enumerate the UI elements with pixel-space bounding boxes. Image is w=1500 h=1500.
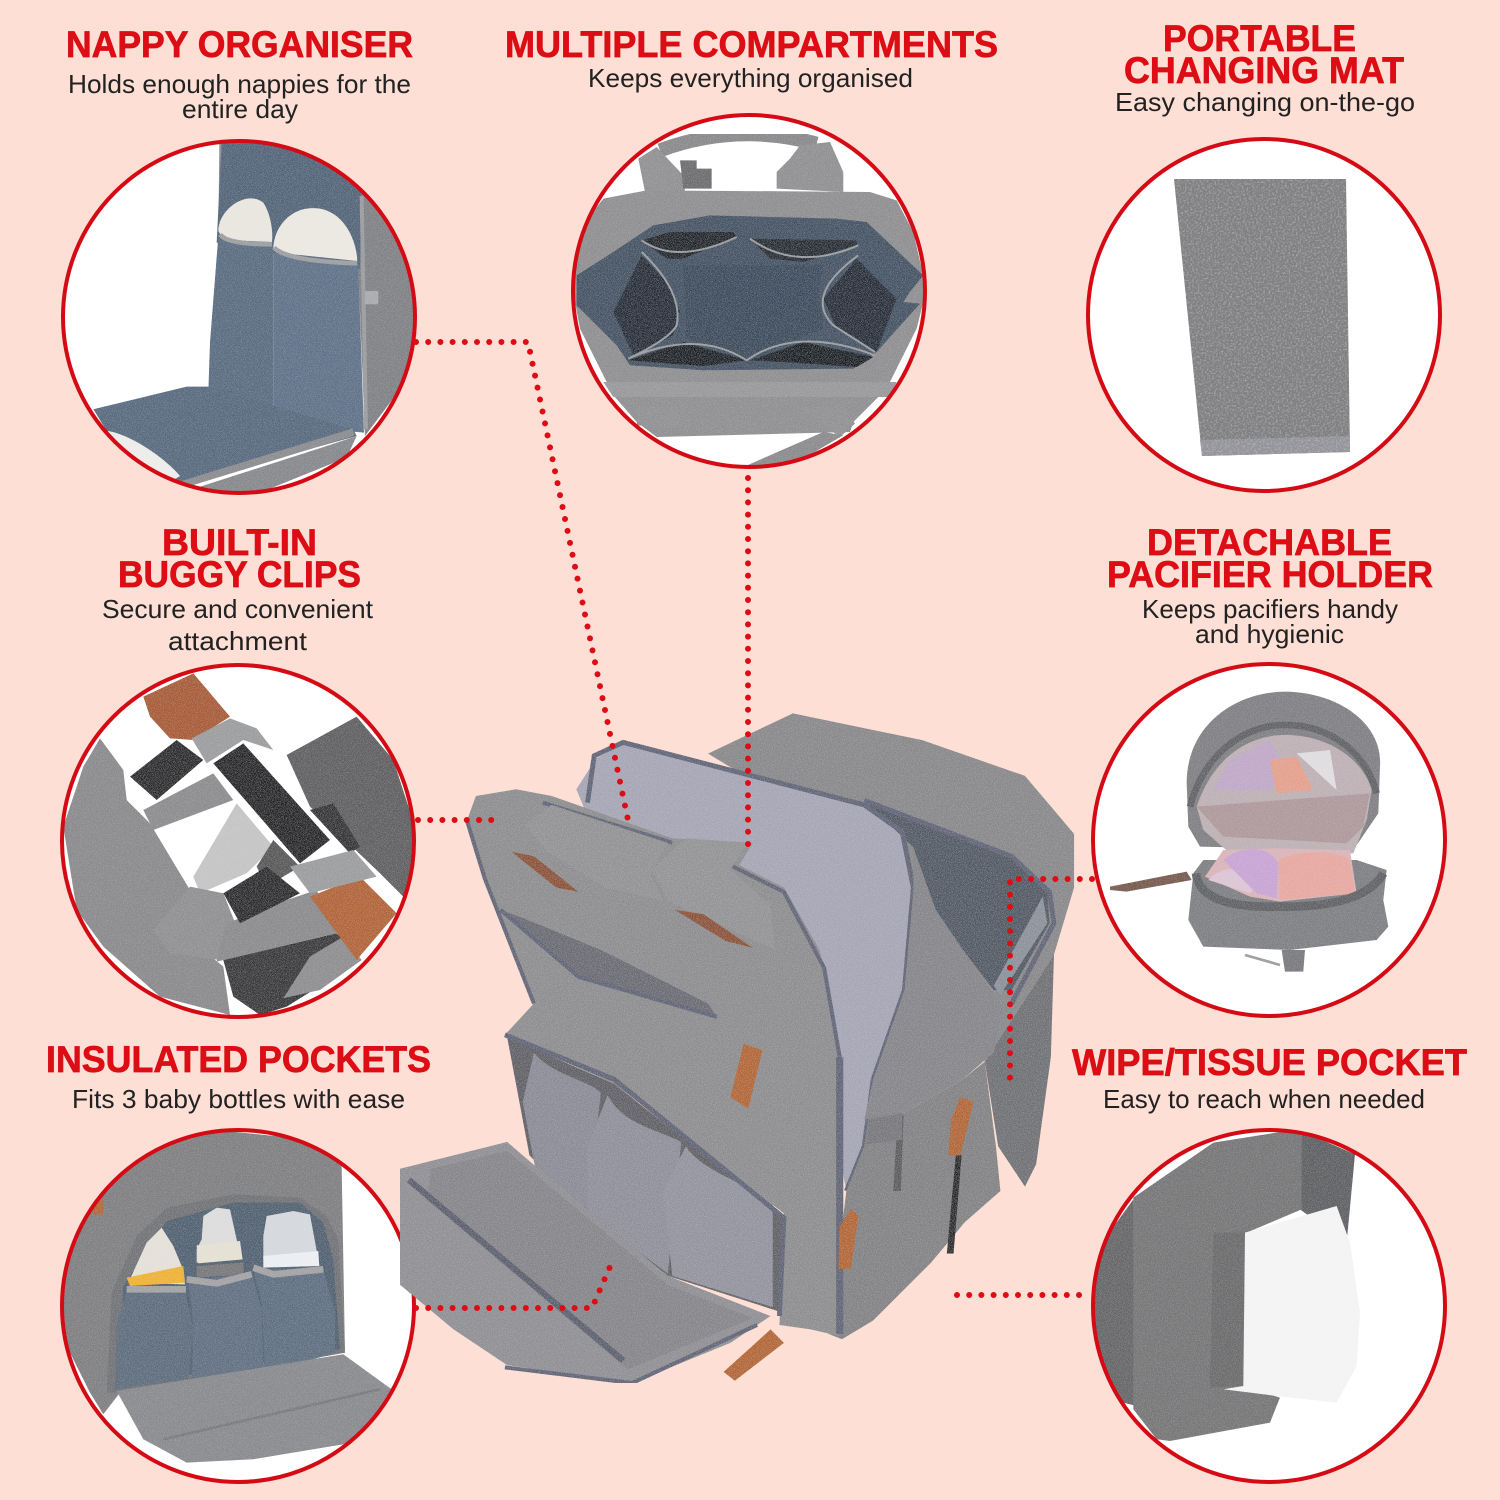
carry handle left [525,805,668,901]
heading: wipe tissue pocket: WIPE/TISSUE POCKET [1072,1042,1467,1083]
heading: wipe tissue pocket [1072,1042,1467,1114]
heading: wipe tissue pocket: Easy to reach when needed [1103,1084,1425,1114]
inner pale strip [994,896,1047,995]
panel: wipe tissue pocket circle [1090,1130,1445,1482]
heading: built-in buggy clips: attachment [168,626,308,656]
heading: nappy organiser: Holds enough nappies for the [68,69,411,99]
backpack front silhouette [467,789,840,1336]
dotted leader: insulated pockets [416,1262,612,1308]
bottle pocket interior [507,1037,784,1312]
heading: multiple compartments: MULTIPLE COMPARTMENTS [505,24,998,65]
leather zip puller front [730,1044,762,1108]
heading: detachable pacifier holder: Keeps pacifiers handy [1142,594,1398,624]
flap pocket opening [500,910,717,1017]
heading: built-in buggy clips: Secure and convenient [102,594,374,624]
icon: folded changing mat [1174,179,1350,456]
heading: portable changing mat [1115,18,1415,117]
flap bottom zip [505,1325,757,1383]
flap zip [409,1180,623,1361]
heading: multiple compartments [505,24,998,93]
open front flap [400,1142,771,1383]
heading: nappy organiser: entire day [182,94,298,124]
vertical main zip [832,1057,848,1334]
opened compartment lining [576,745,913,1191]
side webbing [866,1113,902,1144]
carry handle right [652,838,775,950]
heading: detachable pacifier holder: and hygienic [1195,619,1344,649]
panel: buggy clips circle [62,665,415,1017]
dotted leader: compartments [745,478,751,850]
dotted leader: wipe pocket [957,1292,1090,1298]
heading: portable changing mat: CHANGING MAT [1124,50,1404,91]
pocket zip [505,1035,784,1316]
leather zip puller centre [838,1209,858,1269]
flap zips [467,803,840,1057]
heading: insulated pockets: Fits 3 baby bottles with ease [72,1084,405,1114]
heading: insulated pockets: INSULATED POCKETS [46,1039,431,1080]
heading: built-in buggy clips [102,522,374,656]
heading: portable changing mat: Easy changing on-the-go [1115,87,1415,117]
panel: nappy organiser circle [63,141,415,493]
leather tab left [512,852,579,892]
zip puller [724,1329,784,1381]
leather zip puller side [948,1097,974,1155]
heading: nappy organiser [66,24,413,124]
panel: insulated pockets circle [60,1129,414,1482]
heading: built-in buggy clips: BUILT-IN [162,522,317,563]
zip around opening [587,742,1054,1191]
heading: built-in buggy clips: BUGGY CLIPS [118,554,361,595]
dark side lining [864,800,1050,990]
side slot [947,1155,962,1254]
rear panel [708,713,1074,1062]
mesh side pocket [985,954,1054,1187]
panel: portable changing mat circle [1088,139,1440,491]
dotted leader: nappy organiser [416,342,628,820]
dotted leader: buggy clips [418,817,497,823]
heading: multiple compartments: Keeps everything organised [588,63,913,93]
heading: detachable pacifier holder [1107,522,1433,649]
side body lower [829,1062,1000,1339]
panel: multiple compartments circle [573,115,925,470]
heading: portable changing mat: PORTABLE [1163,18,1356,59]
dotted leader: pacifier holder [1010,879,1092,1085]
main backpack photo [400,713,1074,1383]
side body upper [864,847,1003,1120]
flap mesh [427,1151,753,1370]
heading: nappy organiser: NAPPY ORGANISER [66,24,413,65]
heading: detachable pacifier holder: PACIFIER HOLDER [1107,554,1433,595]
heading: insulated pockets [46,1039,431,1114]
panel: pacifier holder circle [1093,664,1445,1016]
heading: detachable pacifier holder: DETACHABLE [1147,522,1392,563]
side strap slit [893,1115,904,1191]
leather tab right [675,910,753,948]
insulated bottle sleeves [523,1053,601,1209]
